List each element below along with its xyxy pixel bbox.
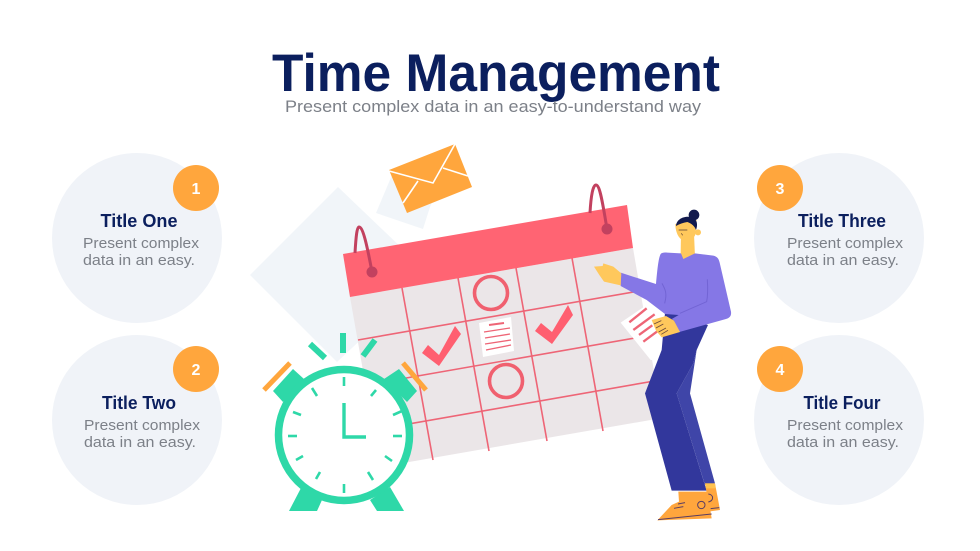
neck: [681, 233, 695, 260]
calendar grid: [358, 258, 660, 460]
left ring: [355, 227, 378, 278]
calendar page: [350, 248, 662, 467]
held paper: [621, 305, 666, 360]
clock hands: [344, 403, 366, 437]
right ring: [590, 185, 612, 234]
title: Time Management: [272, 44, 720, 103]
heading: title two: Title Two: [102, 393, 176, 413]
clock legs: [289, 487, 404, 511]
icon: envelope: [376, 144, 472, 229]
shoes: [657, 483, 720, 520]
clock ticks: [288, 377, 402, 493]
clock ears: [273, 369, 417, 402]
badge 2: [173, 346, 219, 392]
badge 2: 2: [192, 362, 201, 379]
circle mark top: [474, 276, 508, 310]
text: title two body: data in an easy.: [84, 434, 196, 451]
note paper: [479, 317, 514, 357]
sweater: [621, 252, 731, 332]
heading: title one: Title One: [100, 211, 178, 231]
badge 1: 1: [192, 181, 201, 198]
panel: title four: [754, 335, 924, 505]
alarm clock: [264, 333, 426, 511]
badge 1: [173, 165, 219, 211]
background diamond: [250, 187, 430, 362]
badge 3: 3: [776, 181, 785, 198]
text: title one body: Present complex: [83, 235, 200, 252]
badge 4: 4: [776, 362, 785, 379]
circle mark bottom: [490, 364, 522, 398]
woman figure: [594, 210, 731, 520]
calendar header: [343, 205, 633, 297]
head: [675, 210, 701, 240]
trousers: [645, 313, 715, 491]
text: title one body: data in an easy.: [83, 252, 195, 269]
pointing hand: [594, 263, 621, 285]
text: title three body: data in an easy.: [787, 252, 899, 269]
subtitle: Present complex data in an easy-to-understand way: [285, 97, 702, 116]
calendar: [343, 185, 662, 467]
check mark left: [422, 326, 461, 366]
text: title two body: Present complex: [84, 417, 201, 434]
holding hand: [652, 316, 680, 337]
check mark right: [535, 305, 573, 344]
text: title three body: Present complex: [787, 235, 904, 252]
orange bells: [264, 363, 426, 390]
panel: title two: [52, 335, 222, 505]
panel: title one: [52, 153, 222, 323]
badge 3: [757, 165, 803, 211]
text: title four body: Present complex: [787, 417, 904, 434]
clock sound ticks: [310, 333, 375, 358]
text: title four body: data in an easy.: [787, 434, 899, 451]
heading: title three: Title Three: [798, 211, 886, 231]
upper body: [594, 210, 731, 337]
panel: title three: [754, 153, 924, 323]
badge 4: [757, 346, 803, 392]
heading: title four: Title Four: [804, 393, 880, 413]
clock face: [278, 370, 410, 500]
